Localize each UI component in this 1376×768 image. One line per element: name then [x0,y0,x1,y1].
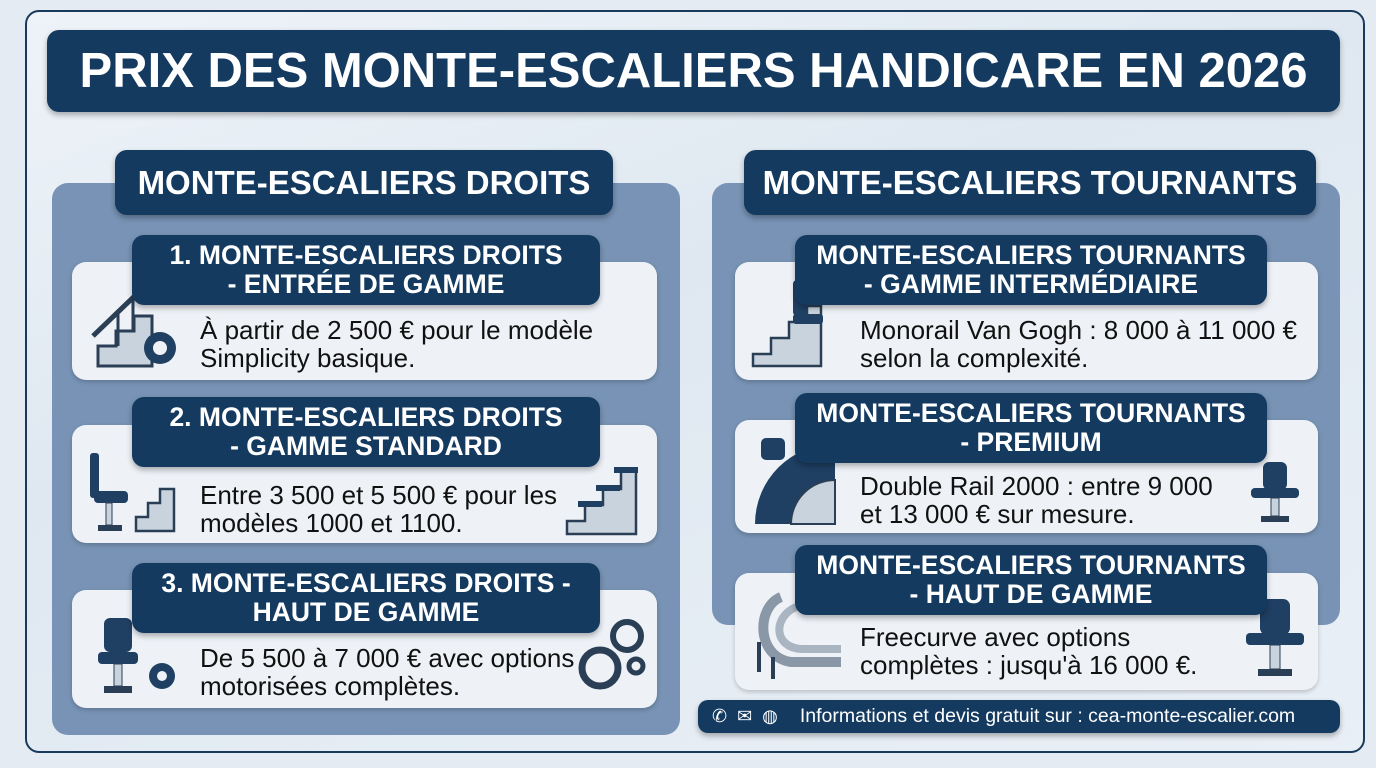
heading: tournants [744,150,1316,215]
label 2 [132,397,600,467]
label t2: - PREMIUM [960,427,1102,457]
label 2: 2. MONTE-ESCALIERS DROITS [169,402,563,432]
text [860,315,1297,373]
text: De 5 500 à 7 000 € avec options [200,643,574,673]
text: Monorail Van Gogh : 8 000 à 11 000 € [860,315,1297,345]
label 3: 3. MONTE-ESCALIERS DROITS - [161,568,571,598]
card: droits haut [72,590,657,708]
icon: curved rail [757,592,841,679]
card: tournants intermediaire [735,262,1318,380]
text: motorisées complètes. [200,671,460,701]
text: À partir de 2 500 € pour le modèle [200,315,593,345]
label 1: - ENTRÉE DE GAMME [228,269,504,299]
label t2: MONTE-ESCALIERS TOURNANTS [816,398,1246,428]
panel: droits [52,183,680,735]
label t3 [795,545,1267,615]
icon: stairs chair [752,280,823,368]
text [200,315,593,373]
icons: contact: ✆✉◍ [712,706,788,726]
label t1 [795,235,1267,305]
text [860,471,1213,529]
text [860,622,1197,680]
card: tournants haut [735,573,1318,690]
label t3: - HAUT DE GAMME [910,579,1152,609]
card: droits entree [72,262,657,380]
heading: tournants: MONTE-ESCALIERS TOURNANTS [763,164,1297,200]
label 2: - GAMME STANDARD [230,431,502,461]
label 1: 1. MONTE-ESCALIERS DROITS [169,240,563,270]
label t1: MONTE-ESCALIERS TOURNANTS [816,240,1246,270]
card: droits standard [72,425,657,543]
panel: tournants [712,183,1340,625]
label t2 [795,393,1267,463]
text: et 13 000 € sur mesure. [860,499,1135,529]
label 3 [132,563,600,633]
label t1: - GAMME INTERMÉDIAIRE [864,269,1198,299]
text: Freecurve avec options [860,622,1130,652]
title: PRIX DES MONTE-ESCALIERS HANDICARE EN 2026 [80,44,1307,98]
text: Entre 3 500 et 5 500 € pour les [200,480,557,510]
icon: stairs right [566,467,638,536]
heading: droits: MONTE-ESCALIERS DROITS [138,164,590,200]
icon: chair [1251,462,1299,522]
text: complètes : jusqu'à 16 000 €. [860,650,1197,680]
card: tournants premium [735,420,1318,533]
label 3: HAUT DE GAMME [253,597,479,627]
icon: chair gear [98,618,175,693]
label t3: MONTE-ESCALIERS TOURNANTS [816,550,1246,580]
footer [698,700,1340,733]
text [200,480,557,538]
text [200,643,574,701]
icon: gears [578,619,646,690]
text: modèles 1000 et 1100. [200,508,463,538]
text: Double Rail 2000 : entre 9 000 [860,471,1213,501]
title [47,30,1340,112]
label 1 [132,235,600,305]
icon: spiral stair [755,438,836,525]
footer text: Informations et devis gratuit sur : cea-monte-escalier.com [800,705,1295,727]
heading: droits [115,150,613,215]
icon: stairs gear [91,294,176,368]
text: selon la complexité. [860,343,1088,373]
icon: chair stairs [90,453,176,532]
icon: chair [1246,599,1304,676]
text: Simplicity basique. [200,343,415,373]
